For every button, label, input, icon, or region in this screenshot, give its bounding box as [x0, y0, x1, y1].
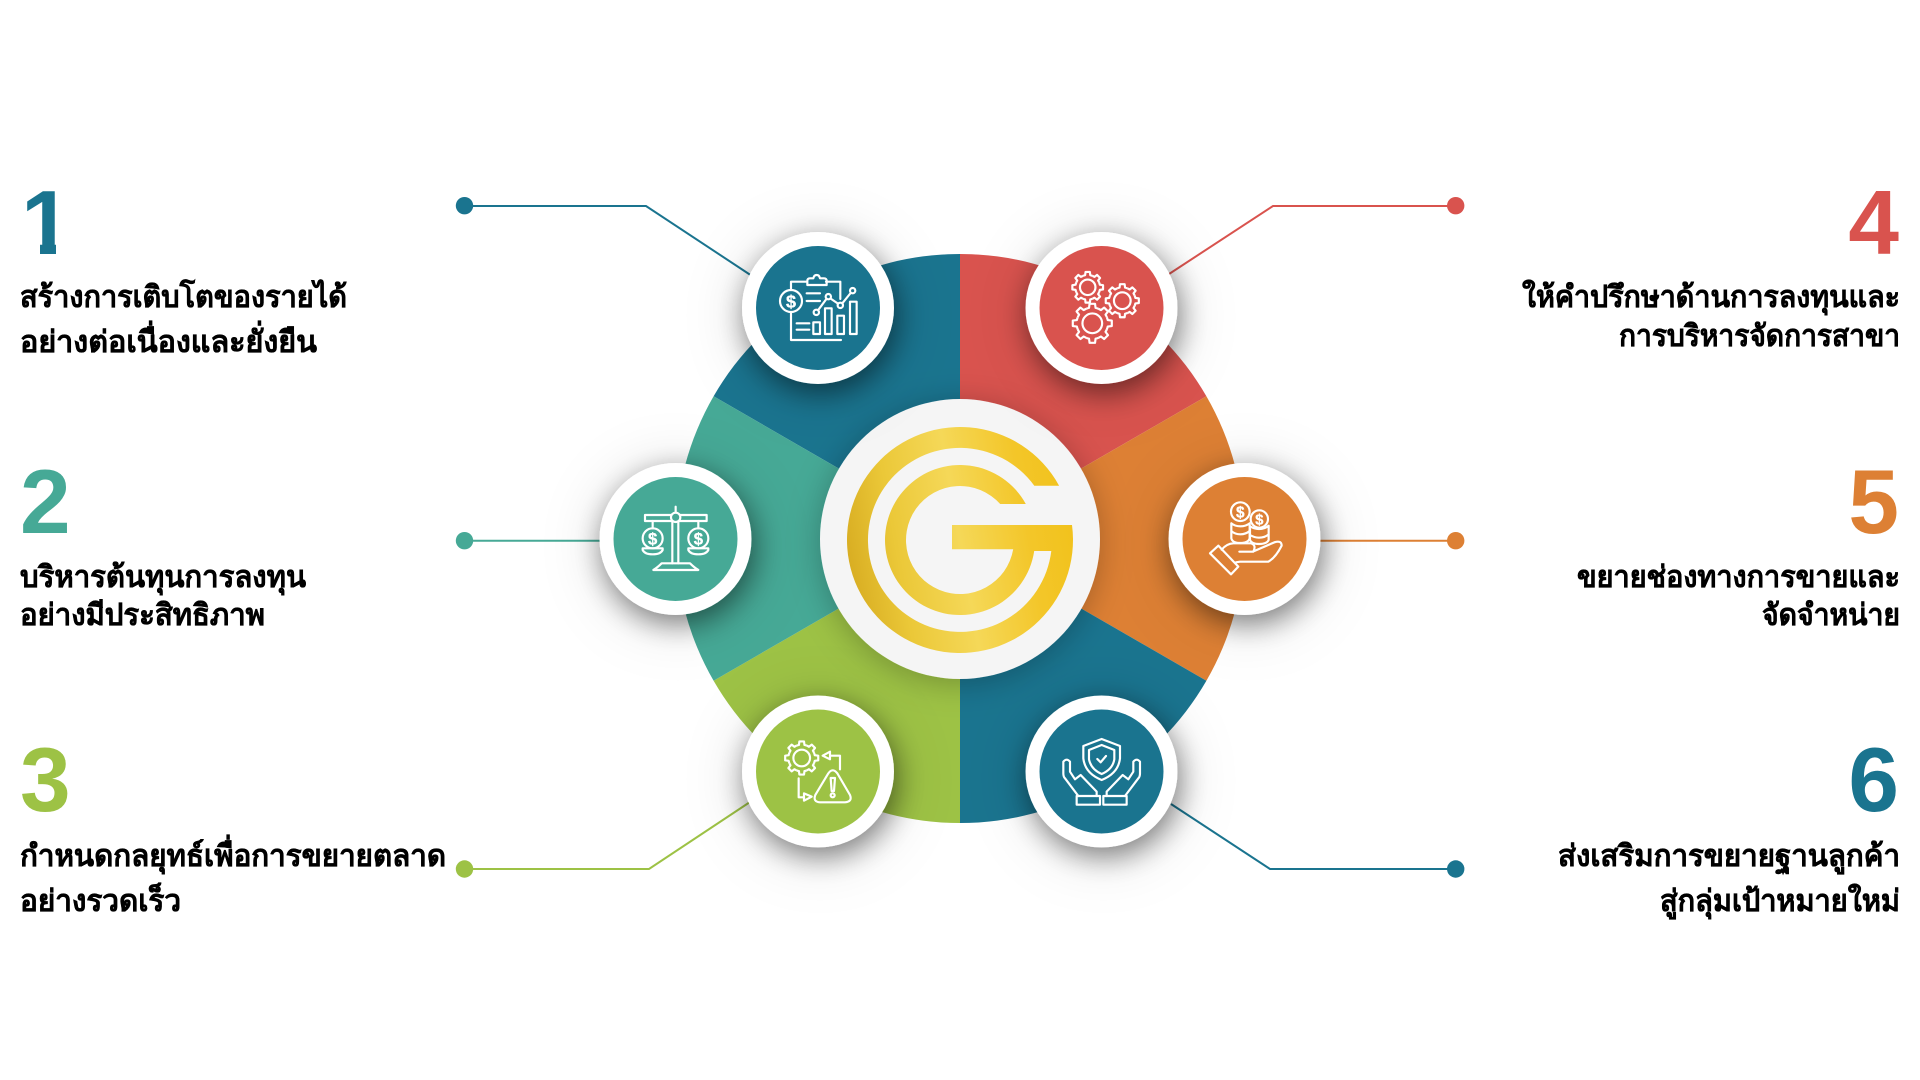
badge 4 [1026, 232, 1178, 384]
connector 6 [1171, 804, 1464, 878]
item 5: 5 [1848, 452, 1899, 553]
item 3: อย่างรวดเร็ว [20, 882, 181, 918]
item 4: ให้คำปรึกษาด้านการลงทุนและ [1522, 279, 1900, 316]
logo G [847, 427, 1073, 653]
item 1: อย่างต่อเนื่องและยั่งยืน [20, 320, 317, 359]
connector 4 [1166, 197, 1464, 276]
connector 2 [456, 532, 604, 549]
icon: gears [1072, 272, 1139, 343]
icon: coins in hand: $ [1255, 512, 1263, 528]
icon: hands with shield [1063, 739, 1140, 805]
item 3: กำหนดกลยุทธ์เพื่อการขยายตลาด [20, 834, 446, 875]
connector 5 [1316, 532, 1464, 549]
item 6 [1558, 730, 1900, 920]
item 6: 6 [1848, 730, 1899, 831]
item 5: ขยายช่องทางการขายและ [1577, 561, 1900, 594]
item 2: บริหารต้นทุนการลงทุน [20, 561, 306, 596]
item 6: สู่กลุ่มเป้าหมายใหม่ [1660, 883, 1900, 920]
item 5 [1577, 452, 1900, 632]
segment 6 blue [960, 538, 1206, 823]
icon: scales: $ [648, 529, 658, 548]
segment 5 orange [960, 396, 1245, 681]
icon: gear and warning [785, 741, 851, 802]
pie wheel [675, 254, 1245, 823]
icon: coins in hand: $ [1236, 504, 1245, 521]
item 3 [20, 730, 446, 918]
item 2 [20, 452, 306, 632]
badge 5 [1168, 463, 1320, 615]
item 4 [1522, 173, 1900, 353]
item 5: จัดจำหน่าย [1762, 599, 1900, 632]
item 4: 4 [1848, 173, 1899, 274]
segment 1 blue [714, 254, 960, 538]
item 6: ส่งเสริมการขยายฐานลูกค้า [1558, 840, 1900, 876]
item 2: 2 [20, 452, 71, 553]
segment 3 lime [714, 538, 960, 823]
item 1: 1 [21, 173, 72, 274]
item 2: อย่างมีประสิทธิภาพ [20, 599, 265, 632]
connector 3 [456, 802, 750, 878]
badge 2 [600, 463, 752, 615]
badge 6 [1026, 696, 1178, 848]
badge 1 [742, 232, 894, 384]
segment 2 teal [675, 396, 960, 681]
badge 3 [742, 696, 894, 848]
item 3: 3 [20, 730, 71, 831]
icon: clipboard chart: $ [786, 292, 796, 312]
icon: scales [643, 507, 708, 570]
icon: scales: $ [694, 529, 704, 548]
connector 1 [456, 197, 752, 276]
center circle with G logo [820, 399, 1100, 679]
icon: coins in hand [1210, 502, 1282, 574]
item 1: สร้างการเติบโตของรายได้ [20, 278, 347, 314]
icon: clipboard chart [780, 275, 857, 340]
segment 4 red [960, 254, 1206, 538]
item 1 [20, 191, 347, 353]
item 4: การบริหารจัดการสาขา [1619, 320, 1900, 353]
